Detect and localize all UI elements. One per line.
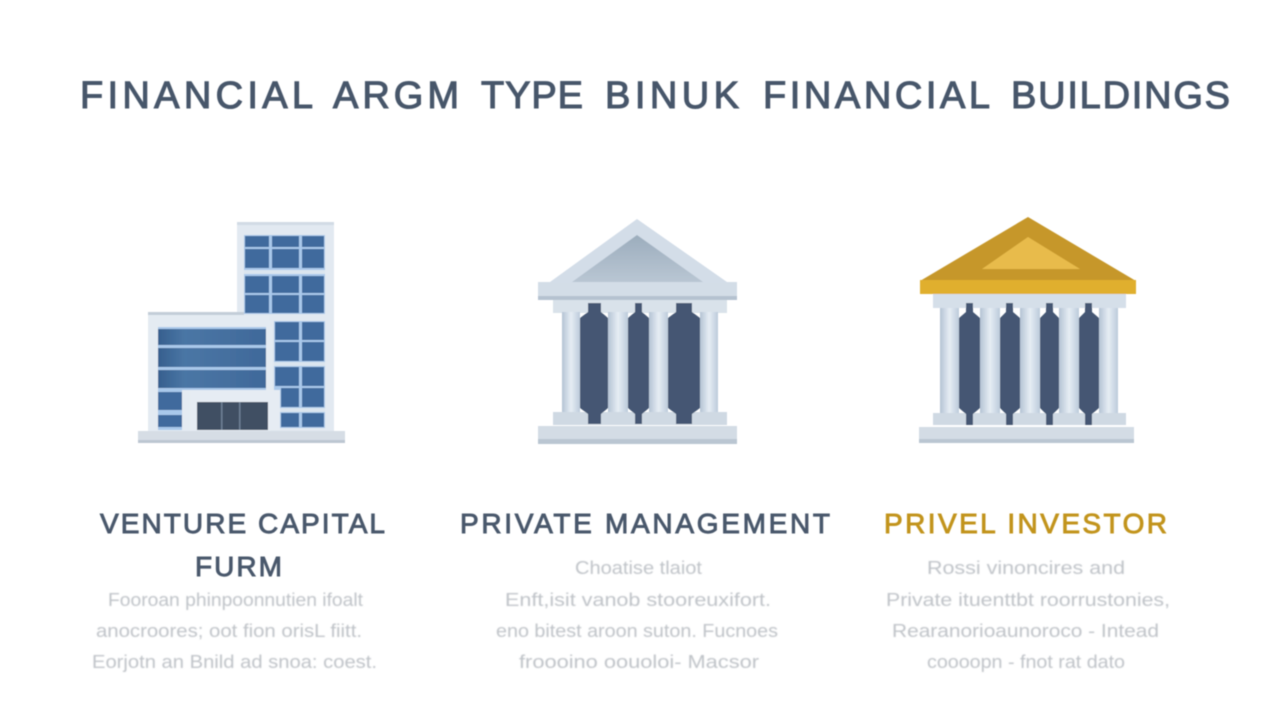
icon: classical bank — [538, 219, 737, 444]
title: FINANCIAL — [80, 75, 313, 117]
title: BINUK — [605, 75, 739, 117]
text block: private management description — [496, 558, 778, 672]
text block: private management description: Choatise tlaiot — [575, 558, 702, 578]
text block: private management description: froooino oouoloi- Macsor — [519, 652, 759, 672]
heading: private management: PRIVATE MANAGEMENT — [460, 508, 830, 539]
title: FINANCIAL — [763, 75, 990, 117]
heading: privel investor: PRIVEL INVESTOR — [884, 508, 1167, 539]
icon: office building — [138, 222, 345, 443]
icon: gold roof bank — [919, 217, 1136, 443]
title: TYPE — [481, 75, 583, 117]
text block: privel investor description: Rearanorioaunoroco - Intead — [892, 621, 1159, 641]
heading: venture capital firm: FURM — [195, 551, 282, 582]
heading: venture capital firm: VENTURE CAPITAL — [100, 508, 385, 539]
text block: private management description: Enft,isit vanob stooreuxifort. — [505, 590, 771, 610]
text block: venture capital description: Fooroan phinpoonnutien ifoalt — [108, 590, 363, 610]
text block: private management description: eno bitest aroon suton. Fucnoes — [496, 621, 778, 641]
text block: venture capital description: anocroores; oot fion orisL fiitt. — [96, 621, 362, 641]
text block: venture capital description: Eorjotn an Bnild ad snoa: coest. — [92, 652, 377, 672]
title: ARGM — [333, 75, 459, 117]
text block: privel investor description: coooopn - fnot rat dato — [927, 652, 1125, 672]
text block: privel investor description — [886, 558, 1170, 672]
heading: venture capital firm — [100, 508, 385, 582]
text block: venture capital description — [92, 590, 377, 672]
text block: privel investor description: Rossi vinoncires and — [927, 558, 1125, 578]
text block: privel investor description: Private ituenttbt roorrustonies, — [886, 590, 1170, 610]
title: BUILDINGS — [1011, 75, 1230, 117]
title — [80, 75, 1230, 117]
